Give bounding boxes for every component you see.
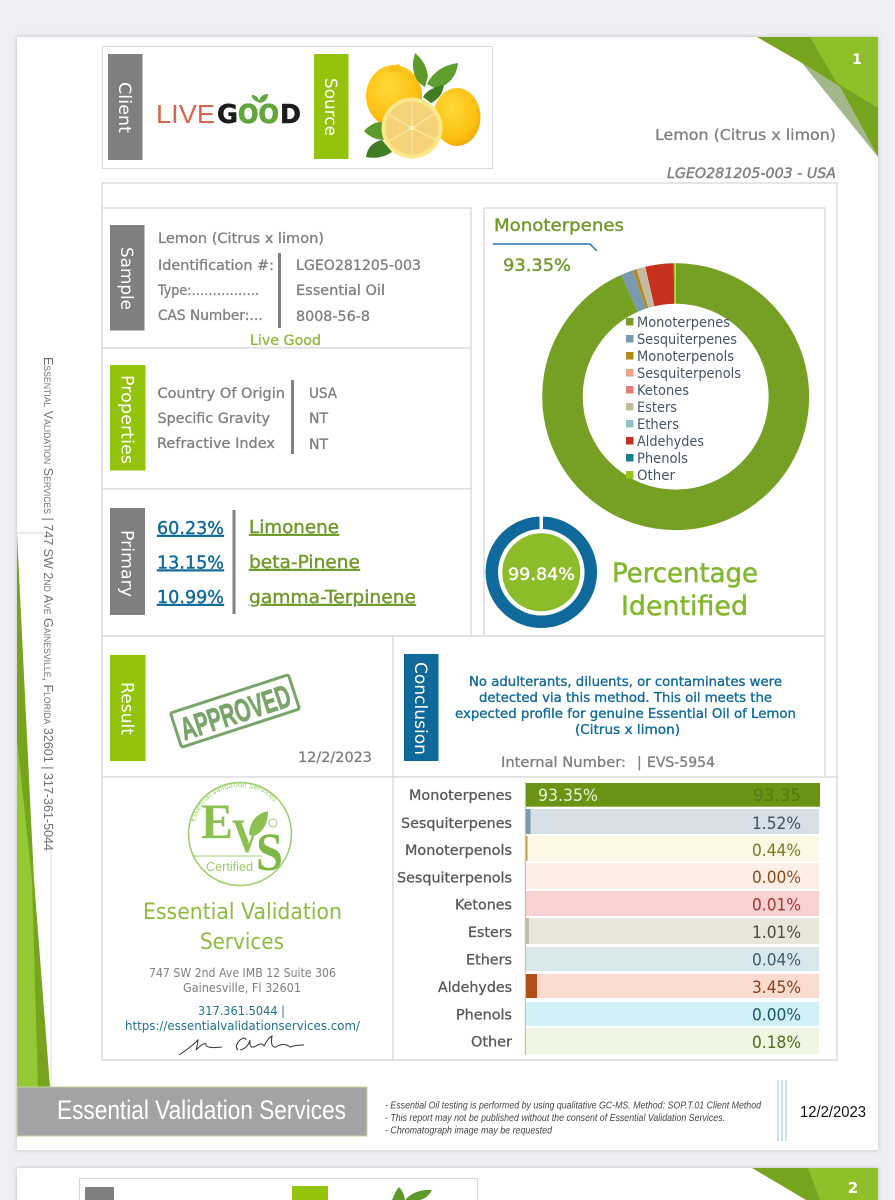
title underline: [493, 244, 597, 251]
page 2 sheet: [17, 1168, 878, 1200]
sample fields: Lemon (Citrus x limon): [158, 231, 324, 247]
panel: conclusion: [393, 636, 825, 777]
page 2 corner decoration: 2: [848, 1179, 858, 1197]
bar: Ethers: 0.04%: [752, 950, 801, 970]
conclusion text: expected profile for genuine Essential Oil of Lemon: [455, 706, 796, 722]
sample label: Sample: [116, 247, 136, 310]
internal number: |: [637, 755, 642, 771]
conclusion text: [455, 674, 796, 738]
sample fields: LGEO281205-003: [296, 258, 421, 274]
percentage identified caption: Percentage: [612, 558, 758, 589]
panel: primary constituents: [102, 489, 471, 636]
bar: Phenols: 0.00%: [752, 1006, 801, 1026]
donut legend: Sesquiterpenes: [637, 332, 737, 348]
footer notes: - Essential Oil testing is performed by using qualitative GC-MS. Method: SOP.T.01 Client Method: [385, 1100, 761, 1112]
properties fields: Refractive Index: [157, 436, 275, 452]
donut legend: Esters: [637, 400, 677, 416]
donut legend: Ethers: [637, 417, 679, 433]
logo: LiveGood: OO: [238, 100, 279, 130]
sample fields: Type:…………….: [157, 283, 259, 299]
conclusion label: Conclusion: [410, 662, 430, 755]
primary percentages: [157, 518, 224, 608]
company name: Essential Validation: [143, 900, 342, 925]
chart title: Monoterpenes: [494, 216, 624, 236]
bar: Ethers: Ethers: [466, 952, 512, 968]
approved stamp: APPROVED: [176, 678, 295, 747]
bar: Sesquiterpenes: [401, 809, 819, 834]
client label: [108, 54, 142, 160]
client name: Live Good: [250, 333, 321, 349]
EVS certified logo: Certified: [206, 859, 253, 874]
EVS certified logo: [188, 782, 292, 886]
properties fields: [157, 380, 337, 454]
panel: class bar chart: [393, 777, 837, 1060]
bar: Monoterpenes: 93.35%: [538, 786, 598, 806]
footer notes: - This report may not be published without the consent of Essential Validation Services.: [385, 1113, 725, 1124]
page 2 corner decoration: [752, 1168, 878, 1200]
primary percentages: 10.99%: [157, 587, 224, 608]
percentage identified caption: Identified: [621, 591, 748, 622]
properties fields: NT: [309, 411, 328, 427]
company name: [143, 900, 342, 955]
bar: Other: Other: [471, 1034, 512, 1050]
bar: Esters: [468, 918, 819, 944]
donut legend: Sesquiterpenols: [637, 366, 741, 382]
panel: donut chart: [484, 208, 825, 636]
page 2 header panel: [80, 1178, 478, 1200]
bar: Aldehydes: 3.45%: [752, 978, 801, 998]
EVS certified logo: S: [256, 822, 283, 882]
properties fields: USA: [309, 386, 337, 402]
donut legend: Monoterpenols: [637, 349, 734, 365]
corner decoration with page number: [757, 37, 878, 157]
primary percentages: 60.23%: [157, 518, 224, 539]
primary compounds: beta-Pinene: [249, 552, 360, 573]
bar: Sesquiterpenes: 1.52%: [752, 814, 801, 834]
panel: properties: [102, 348, 471, 489]
primary compounds: gamma-Terpinene: [249, 587, 416, 608]
bar: Sesquiterpenes: Sesquiterpenes: [401, 816, 512, 832]
bar: Other: [471, 1028, 819, 1054]
internal number: Internal Number:: [501, 755, 626, 771]
source label: Source: [320, 78, 340, 136]
primary compounds: Limonene: [249, 517, 339, 538]
donut legend: Phenols: [637, 451, 688, 467]
bar: Sesquiterpenols: [397, 863, 819, 889]
footer notes: [385, 1100, 761, 1136]
signature: [179, 1036, 304, 1055]
bar: Monoterpenes: Monoterpenes: [409, 788, 512, 804]
primary label: [110, 508, 145, 615]
approved stamp: [170, 675, 300, 749]
header sample id: LGEO281205-003 - USA: [667, 166, 836, 182]
result label: Result: [116, 682, 136, 735]
conclusion text: (Citrus x limon): [575, 722, 680, 738]
footer divider: [778, 1080, 786, 1141]
corner decoration with page number: 1: [852, 52, 862, 68]
sample fields: 8008-56-8: [296, 309, 370, 325]
company contact: [125, 1004, 361, 1033]
sample label: [110, 225, 144, 330]
donut legend: Aldehydes: [637, 434, 704, 450]
EVS certified logo: Essential Validation Services: [190, 782, 276, 822]
bar: Phenols: [456, 1002, 819, 1026]
left side decoration: [17, 533, 51, 1087]
bar: Sesquiterpenols: 0.00%: [752, 868, 801, 888]
properties fields: Specific Gravity: [158, 411, 270, 427]
properties label: Properties: [116, 375, 136, 464]
sample fields: Essential Oil: [296, 283, 385, 299]
chart value: 93.35%: [503, 256, 571, 276]
bar: Aldehydes: [438, 974, 819, 998]
bar: Monoterpenes: 93.35: [753, 786, 801, 806]
panel: sample: [102, 208, 471, 349]
conclusion text: detected via this method. This oil meets the: [479, 690, 772, 706]
main frame: [102, 183, 837, 1060]
EVS certified logo: V: [232, 810, 262, 863]
bar: Ethers: [466, 947, 819, 971]
panel: client and source header: [102, 46, 492, 168]
bar: Phenols: Phenols: [456, 1008, 512, 1024]
logo: LiveGood: LIVE: [156, 99, 215, 129]
internal number: EVS-5954: [647, 755, 715, 771]
bar: Aldehydes: Aldehydes: [438, 980, 512, 996]
primary label: Primary: [116, 530, 136, 597]
conclusion text: No adulterants, diluents, or contaminates were: [469, 674, 782, 690]
footer date: 12/2/2023: [800, 1104, 866, 1121]
properties fields: Country Of Origin: [158, 386, 285, 402]
bar: Ketones: Ketones: [455, 898, 512, 914]
properties label: [110, 365, 146, 470]
company address: [149, 966, 336, 995]
primary compounds: [249, 517, 416, 608]
EVS certified logo: E: [201, 793, 233, 849]
percentage identified gauge: [492, 515, 591, 622]
footer banner: [17, 1087, 367, 1136]
bar: Esters: 1.01%: [752, 923, 801, 943]
primary percentages: 13.15%: [157, 552, 224, 574]
logo: LiveGood: D: [280, 100, 301, 130]
panel: certification: [125, 782, 361, 1056]
bar: Monoterpenols: Monoterpenols: [405, 843, 512, 859]
company contact: https://essentialvalidationservices.com/: [125, 1019, 361, 1033]
bar: Sesquiterpenols: Sesquiterpenols: [397, 870, 512, 886]
logo: LiveGood: G: [217, 100, 238, 130]
bar: Ketones: [455, 891, 819, 916]
company address: 747 SW 2nd Ave IMB 12 Suite 306: [149, 966, 336, 980]
bar: Monoterpenes: [409, 783, 820, 807]
sample fields: CAS Number:…: [158, 308, 263, 324]
donut legend: Monoterpenes: [637, 315, 730, 331]
percentage identified caption: [612, 558, 758, 622]
sample fields: [157, 231, 421, 328]
result date: 12/2/2023: [298, 750, 372, 766]
company name: Services: [200, 930, 284, 955]
company address: Gainesville, Fl 32601: [183, 981, 301, 995]
icon: lemons: [364, 53, 480, 158]
bar: Other: 0.18%: [752, 1033, 801, 1053]
company contact: 317.361.5044 |: [198, 1004, 285, 1018]
vertical address text: Essential Validation Services | 747 SW 2nd Ave Gainesville, Florida 32601 | 317-361-5044: [41, 357, 56, 851]
logo: LiveGood: [156, 94, 301, 130]
percentage identified gauge: 99.84%: [508, 565, 575, 585]
bar: Monoterpenols: [405, 836, 819, 861]
footer banner: Essential Validation Services: [57, 1095, 346, 1125]
result label: [110, 655, 146, 761]
bar: Esters: Esters: [468, 925, 512, 941]
donut legend: Ketones: [637, 383, 689, 399]
donut legend: [626, 315, 741, 484]
client label: Client: [114, 82, 134, 133]
header sample name: Lemon (Citrus x limon): [655, 126, 836, 144]
source label: [314, 54, 348, 159]
donut chart: [562, 284, 789, 510]
bar: Monoterpenols: 0.44%: [752, 841, 801, 861]
bar: Ketones: 0.01%: [752, 896, 801, 916]
footer notes: - Chromatograph image may be requested: [385, 1126, 552, 1136]
properties fields: NT: [309, 437, 328, 453]
sample fields: Identification #:: [158, 258, 274, 274]
panel: result: [102, 636, 393, 777]
donut legend: Other: [637, 468, 675, 484]
conclusion label: [404, 654, 438, 761]
internal number: [501, 755, 715, 771]
